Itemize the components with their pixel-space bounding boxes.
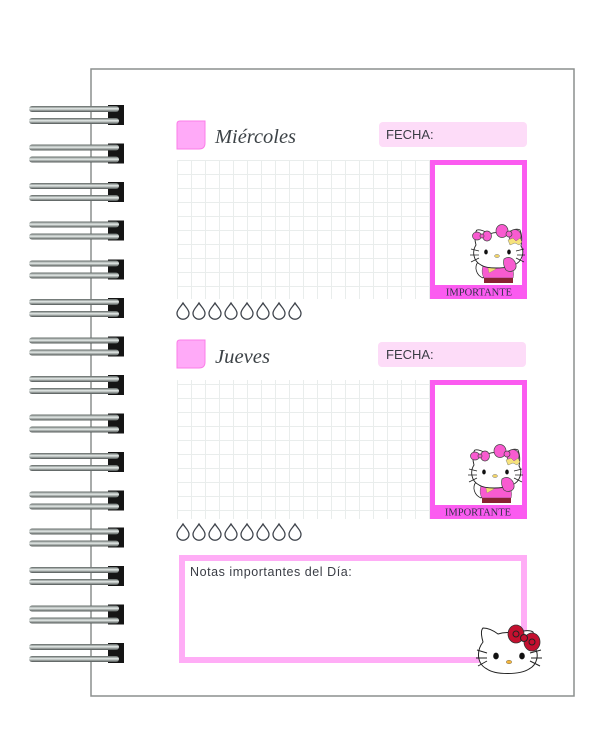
panel: notes — [182, 558, 524, 660]
date field: FECHA: — [386, 347, 434, 362]
day checkbox — [177, 121, 205, 149]
notebook page — [91, 69, 574, 696]
spiral binding — [29, 105, 124, 663]
day title: Jueves — [215, 346, 270, 368]
icon: kitty — [470, 224, 525, 283]
date field: FECHA: — [386, 127, 434, 142]
day checkbox — [177, 340, 205, 368]
notes heading: Notas importantes del Día: — [190, 565, 352, 579]
icon: kitty with red bow — [476, 625, 542, 674]
date field — [378, 342, 526, 367]
water drops — [177, 524, 301, 540]
panel: Jueves — [177, 340, 527, 540]
note grid — [177, 380, 430, 519]
important box — [430, 382, 527, 519]
icon: kitty — [468, 444, 523, 503]
important box: IMPORTANTE — [446, 288, 512, 298]
note grid — [177, 160, 430, 299]
panel: Miércoles — [177, 121, 527, 319]
day title: Miércoles — [214, 126, 296, 148]
date field — [379, 122, 527, 147]
important box — [430, 162, 527, 299]
important box: IMPORTANTE — [445, 508, 511, 518]
water drops — [177, 303, 301, 319]
